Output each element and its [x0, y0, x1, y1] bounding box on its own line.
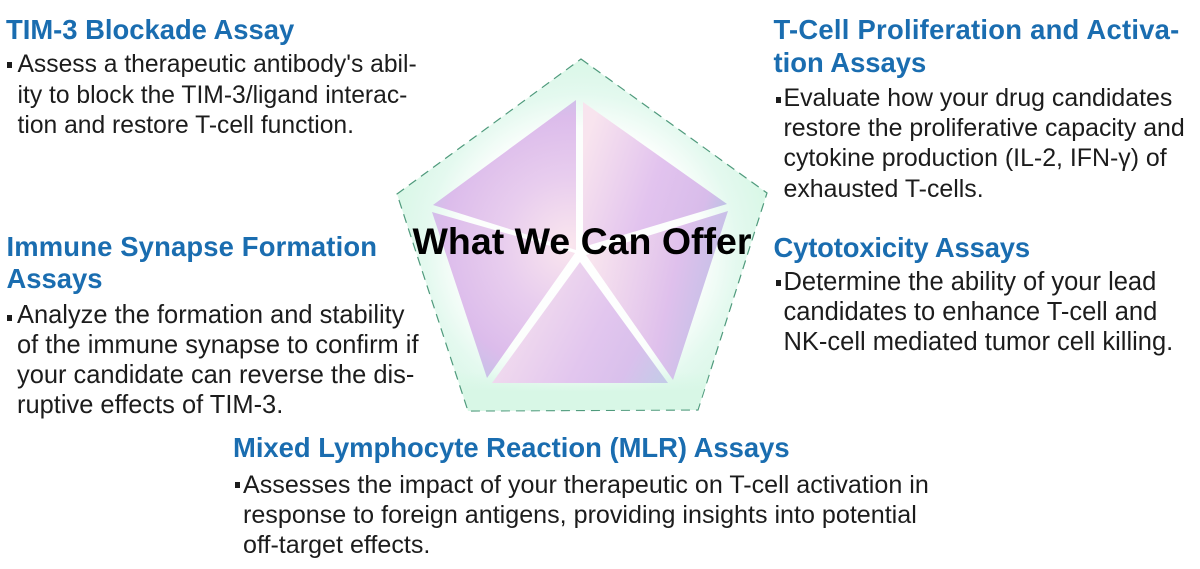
wedge: top left [433, 100, 576, 250]
body text: Analyze the formation and stability [17, 301, 404, 329]
body text: restore the proliferative capacity and [784, 114, 1185, 142]
bottom green band [457, 372, 710, 410]
body text: Assesses the impact of your therapeutic on T-cell activation in [243, 471, 929, 499]
body text: NK-cell mediated tumor cell killing. [784, 328, 1173, 356]
body text: ruptive effects of TIM-3. [17, 391, 283, 419]
body text: Assess a therapeutic antibody's abil- [18, 51, 417, 78]
wedge: left [432, 212, 575, 378]
body text: off-target effects. [243, 531, 430, 559]
heading: Mixed Lymphocyte Reaction (MLR) Assays [233, 432, 790, 463]
body text: Determine the ability of your lead [784, 268, 1156, 296]
section: T-cell proliferation: tion Assays [774, 47, 926, 78]
section: immune synapse [6, 231, 419, 419]
body text: exhausted T-cells. [784, 174, 984, 202]
body text [776, 268, 1173, 356]
body text: your candidate can reverse the dis- [17, 361, 414, 389]
body text: response to foreign antigens, providing insights into potential [243, 501, 917, 529]
heading: Immune Synapse Formation [6, 231, 377, 262]
section: TIM-3 blockade [6, 14, 417, 138]
body text: Evaluate how your drug candidates [784, 84, 1172, 112]
heading: T-Cell Proliferation and Activa- [774, 14, 1180, 45]
body text [7, 301, 419, 419]
section: immune synapse: Assays [6, 263, 102, 294]
body text: tion and restore T-cell function. [18, 112, 354, 138]
body text [235, 471, 929, 559]
section: cytotoxicity [774, 232, 1173, 356]
title: What We Can Offer [413, 220, 751, 262]
heading: TIM-3 Blockade Assay [6, 14, 294, 45]
wedge: bottom [492, 262, 668, 383]
wedge: top right [583, 102, 727, 247]
outer dashed pentagon [397, 59, 767, 411]
body text: candidates to enhance T-cell and [784, 298, 1157, 326]
body text: cytokine production (IL-2, IFN-γ) of [784, 144, 1167, 172]
body text [776, 84, 1185, 202]
body text: of the immune synapse to confirm if [17, 331, 419, 359]
section: T-cell proliferation [774, 14, 1185, 202]
heading: Cytotoxicity Assays [774, 232, 1030, 263]
wedge: right [586, 211, 728, 380]
body text: ity to block the TIM-3/ligand interac- [18, 82, 407, 108]
body text [7, 51, 417, 138]
section: MLR [233, 432, 929, 559]
